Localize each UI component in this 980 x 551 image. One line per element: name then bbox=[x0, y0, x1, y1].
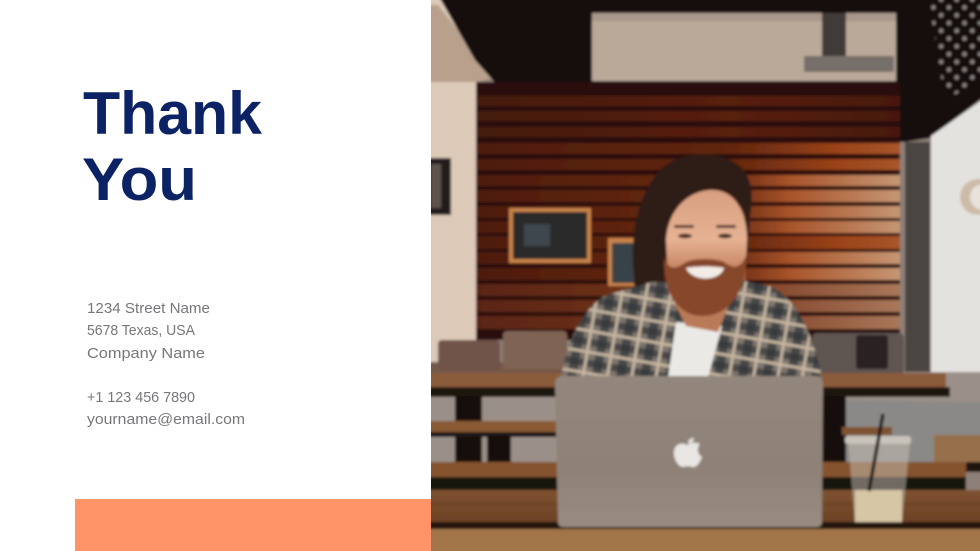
laptop bbox=[555, 376, 823, 527]
title: You bbox=[82, 146, 197, 213]
panel: white text side bbox=[0, 0, 431, 551]
tables and benches bbox=[425, 373, 980, 490]
orange accent bar bbox=[75, 499, 431, 551]
contact details: +1 123 456 7890 bbox=[87, 389, 195, 406]
white tee bbox=[668, 322, 722, 378]
photo: man with laptop in cafe bbox=[425, 0, 980, 551]
contact details: yourname@email.com bbox=[87, 411, 245, 428]
contact details: 5678 Texas, USA bbox=[87, 322, 195, 339]
wooden foreground table bbox=[425, 490, 980, 551]
slatted red wall bbox=[476, 82, 900, 340]
eyes and brows bbox=[674, 225, 736, 238]
contact details: Company Name bbox=[87, 345, 205, 362]
dark post and bright window bbox=[905, 98, 980, 402]
perforated dark corner bbox=[896, 0, 980, 142]
title bbox=[82, 80, 263, 213]
neck bbox=[668, 290, 735, 332]
drink cup bbox=[845, 414, 911, 522]
contact details bbox=[87, 300, 245, 428]
man bbox=[561, 154, 822, 378]
wall pictures bbox=[425, 158, 634, 286]
contact details: 1234 Street Name bbox=[87, 300, 210, 317]
smile bbox=[686, 266, 724, 278]
beard bbox=[664, 256, 746, 316]
sofas bbox=[425, 331, 904, 375]
shirt bbox=[561, 281, 822, 378]
hair bbox=[633, 154, 752, 302]
left wall bbox=[431, 0, 494, 364]
floor bbox=[425, 372, 980, 467]
apple logo bbox=[674, 438, 702, 467]
title: Thank bbox=[83, 80, 263, 147]
ceiling beams bbox=[439, 0, 899, 84]
face bbox=[666, 190, 747, 280]
